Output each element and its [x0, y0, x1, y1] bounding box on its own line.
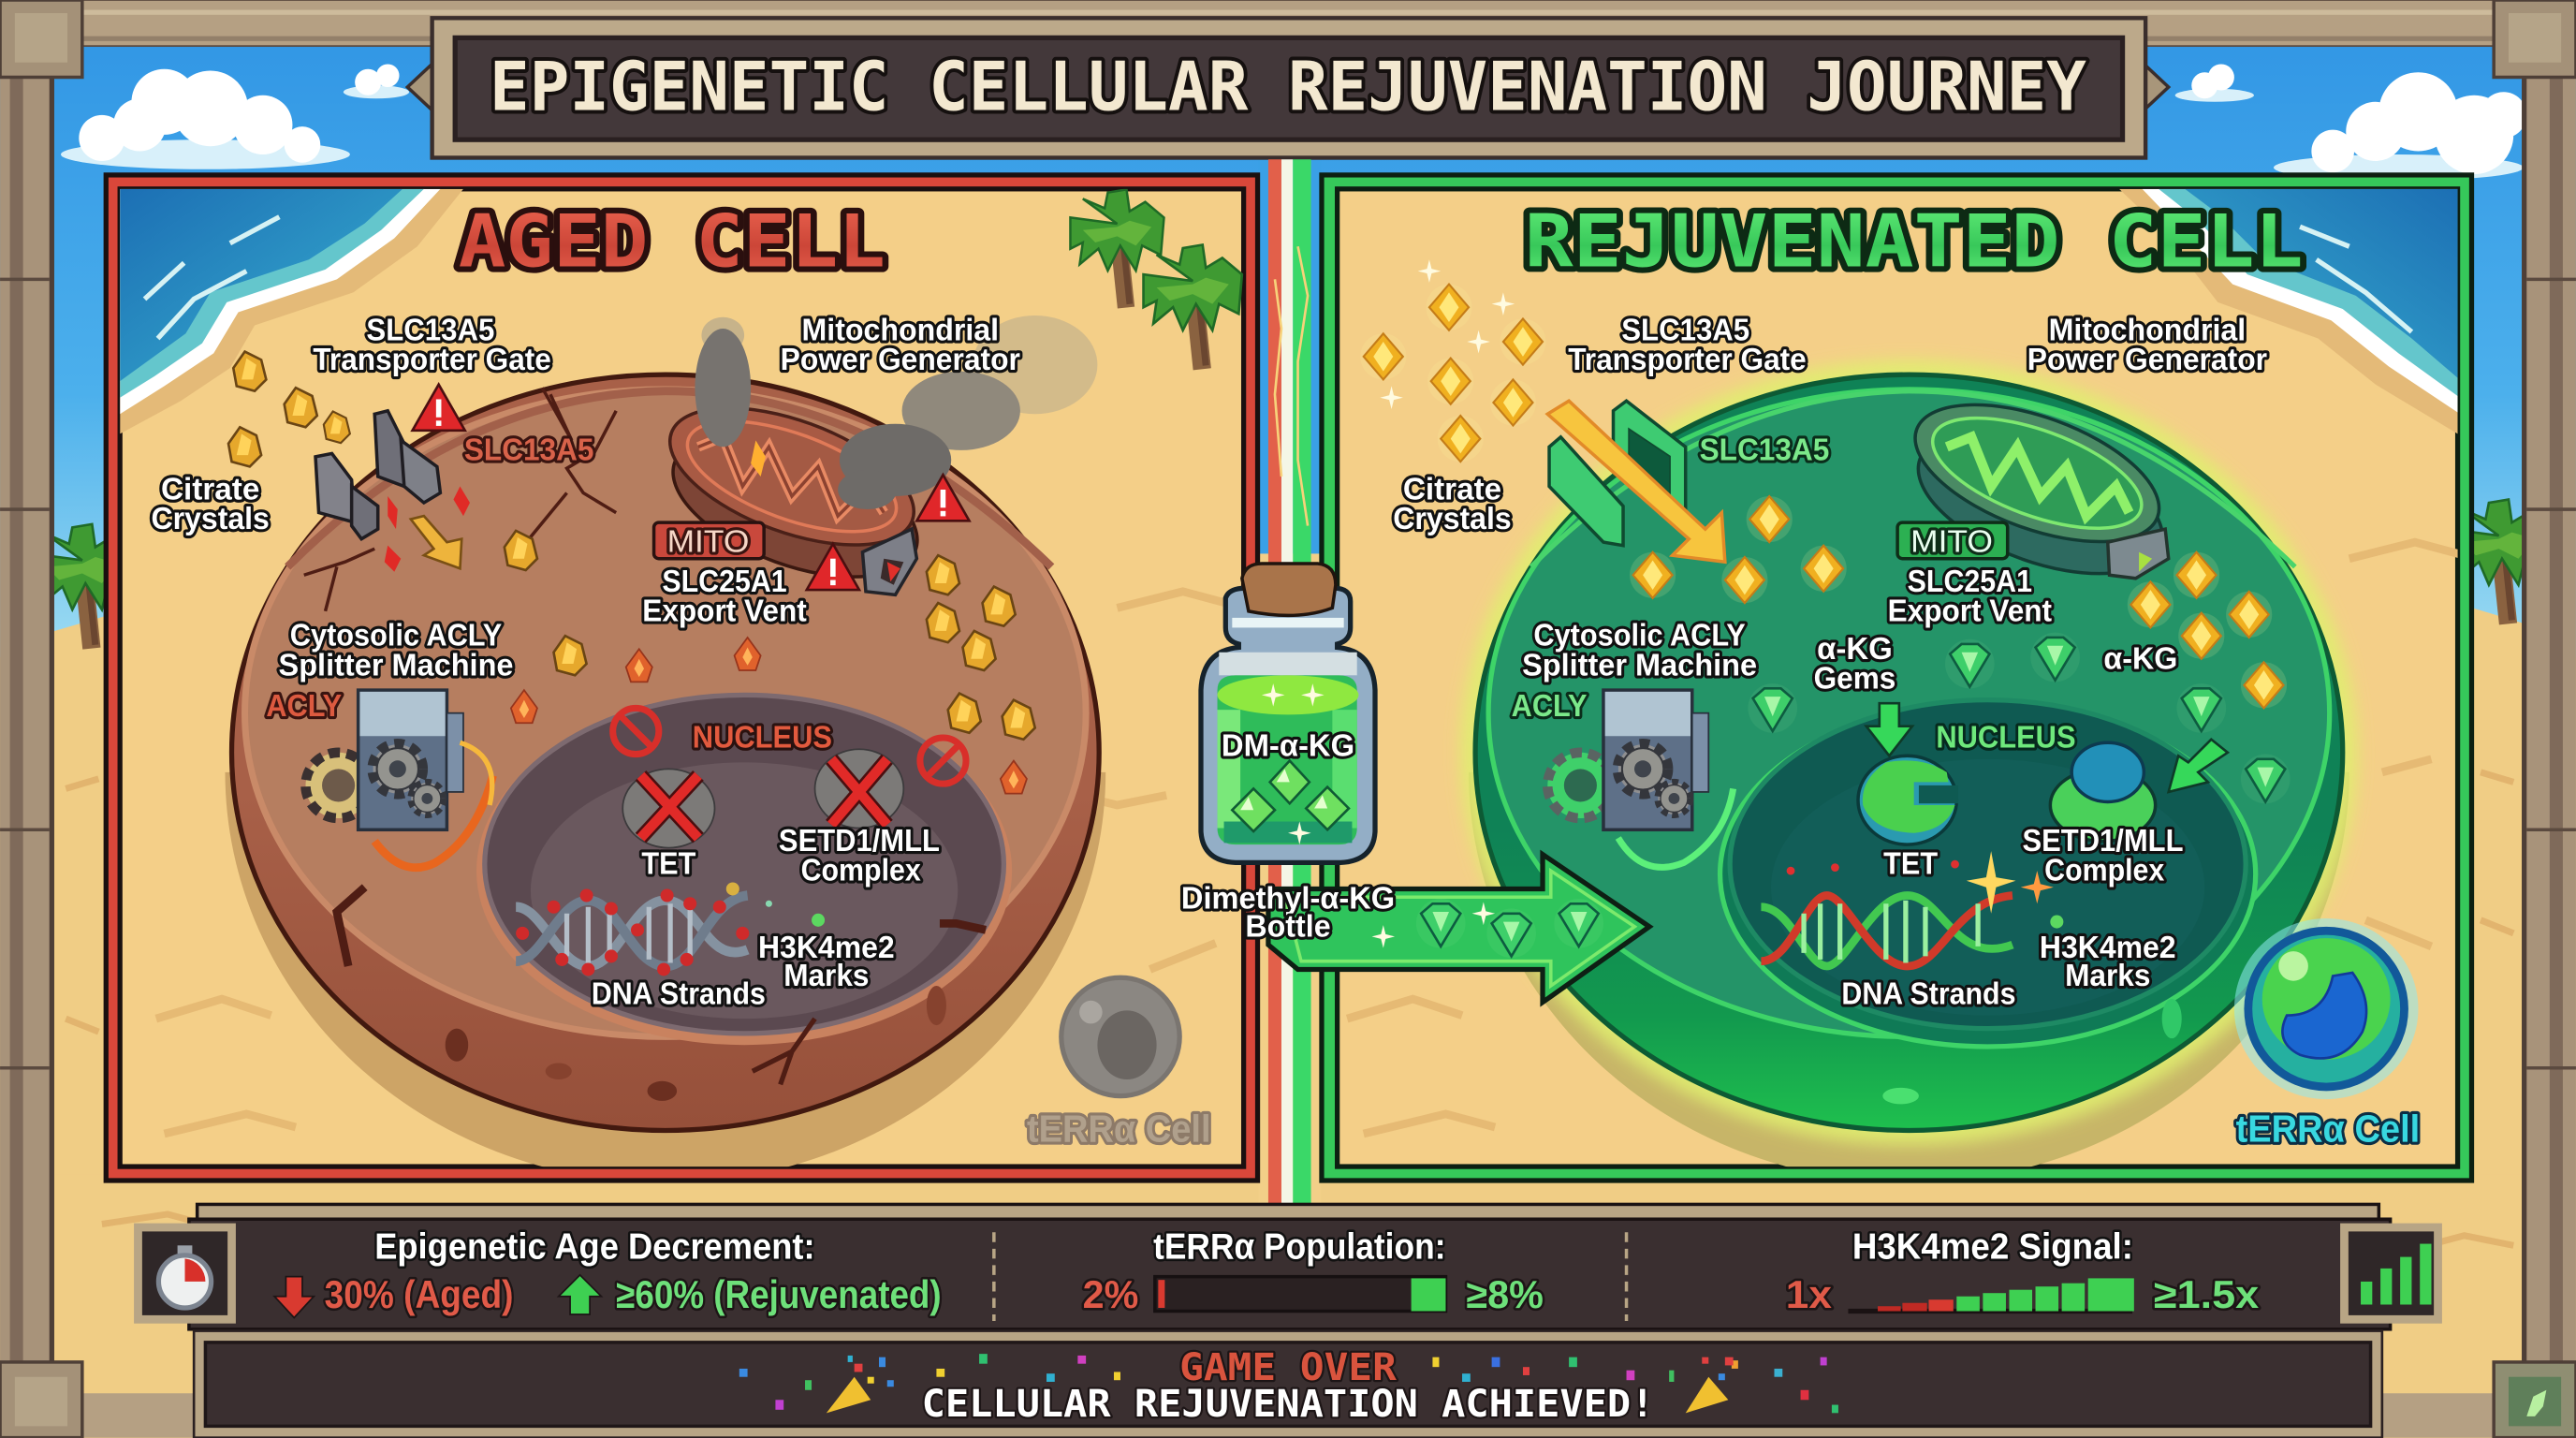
label: SLC25A1 export vent — [1888, 565, 2052, 628]
label: TET: TET — [641, 847, 695, 882]
label: alpha-KG gems: α-KG — [1817, 632, 1893, 667]
rim holes and cracks — [304, 388, 986, 1084]
label: dimethyl-alpha-KG bottle — [1181, 882, 1395, 944]
label: DNA strands: DNA Strands — [592, 976, 766, 1011]
nucleus chamber — [1720, 701, 2256, 1047]
no signs — [613, 708, 966, 784]
label: healthy terra cell: tERRα Cell — [2236, 1108, 2420, 1151]
label: SETD1/MLL complex — [2022, 824, 2183, 888]
dividers — [994, 1232, 1627, 1321]
arrow: treatment into rejuvenated cell — [1268, 855, 1649, 1003]
DNA strands, damaged — [516, 882, 825, 976]
signal icon — [2344, 1227, 2438, 1319]
label: SLC25A1 export vent: SLC25A1 — [1908, 565, 2032, 599]
label: aged terra cell: tERRα Cell — [1027, 1108, 1211, 1151]
mito badge — [1897, 522, 2008, 560]
mito badge: MITO — [1910, 525, 1993, 560]
aged cell body — [232, 374, 1099, 1130]
label: cytosolic ACLY splitter machine: Cytosolic ACLY — [290, 619, 502, 653]
open transporter gate — [1549, 401, 1686, 546]
label: SETD1/MLL complex — [779, 824, 940, 888]
cell glow shadow — [1469, 772, 2349, 1182]
label: SETD1/MLL complex: Complex — [801, 854, 921, 888]
label: SLC13A5 transporter gate: Transporter Gate — [1568, 343, 1807, 377]
sand texture — [156, 542, 1232, 1134]
text: cellular rejuvenation achieved: CELLULAR REJUVENATION ACHIEVED! — [922, 1382, 1654, 1426]
label: nucleus: NUCLEUS — [693, 721, 832, 756]
mito badge: MITO — [667, 525, 749, 560]
label: dimethyl-alpha-KG bottle: Dimethyl-α-KG — [1181, 882, 1395, 917]
label: DNA strands: DNA Strands — [1841, 976, 2015, 1011]
label: SLC25A1 export vent: SLC25A1 — [662, 565, 787, 599]
label: mitochondrial power generator — [781, 313, 1020, 377]
label: SLC25A1 export vent: Export Vent — [642, 594, 807, 628]
healthy mitochondrion — [1897, 377, 2181, 602]
active TET — [1858, 756, 1958, 844]
broken transporter gate — [315, 385, 470, 572]
label: SETD1/MLL complex: SETD1/MLL — [2022, 824, 2183, 858]
arrows into nucleus — [1866, 703, 2228, 792]
label: mitochondrial power generator: Mitochondrial — [2049, 313, 2246, 347]
label: H3K4me2 marks: Marks — [783, 959, 869, 993]
label: H3K4me2 marks: Marks — [2065, 959, 2150, 993]
label: H3K4me2 marks — [2040, 931, 2176, 993]
metric: terra population: tERRα Population: — [1153, 1226, 1445, 1267]
label: mitochondrial power generator: Power Generator — [781, 343, 1020, 377]
damaged mitochondrion — [652, 380, 936, 606]
title text: EPIGENETIC CELLULAR REJUVENATION JOURNEY — [490, 48, 2087, 126]
label: alpha-KG gems: Gems — [1814, 661, 1895, 696]
label: citrate crystals: Crystals — [1393, 502, 1512, 536]
divider: energy stream between panels — [1268, 159, 1311, 1211]
heading: rejuvenated cell: REJUVENATED CELL — [1525, 199, 2304, 284]
confetti right — [1432, 1357, 1838, 1413]
tag: SLC13A5: SLC13A5 — [464, 433, 594, 467]
label: alpha-KG: α-KG — [2103, 641, 2177, 676]
citrate crystals, glowing — [1360, 259, 2287, 708]
label: SETD1/MLL complex: Complex — [2044, 854, 2165, 888]
label: cytosolic ACLY splitter machine: Splitter Machine — [1522, 648, 1757, 682]
label: alpha-KG gems — [1814, 632, 1895, 696]
label: mitochondrial power generator — [2027, 313, 2267, 377]
ACLY machine — [1547, 690, 1734, 867]
label: H3K4me2 marks — [758, 931, 895, 993]
rejuvenated cell body — [1460, 360, 2358, 1145]
metric: H3K4me2 signal: ≥1.5x — [2154, 1272, 2260, 1316]
label: SLC25A1 export vent — [642, 565, 807, 628]
icon: aged terra cell — [1061, 977, 1179, 1096]
label: cytosolic ACLY splitter machine: Cytosolic ACLY — [1533, 619, 1746, 653]
tag: ACLY: ACLY — [1512, 689, 1587, 724]
label: SLC13A5 transporter gate — [313, 313, 551, 377]
label: cytosolic ACLY splitter machine: Splitter Machine — [279, 648, 514, 682]
label: SLC13A5 transporter gate: SLC13A5 — [366, 313, 494, 347]
label: mitochondrial power generator: Power Generator — [2027, 343, 2267, 377]
tag: ACLY: ACLY — [266, 689, 342, 724]
label: DM-alpha-KG: DM-α-KG — [1222, 728, 1354, 763]
mito badge — [654, 522, 764, 560]
metric: H3K4me2 signal — [1786, 1226, 2260, 1316]
glass — [1201, 588, 1375, 862]
metric: epigenetic age decrement: ≥60% (Rejuvenated) — [616, 1272, 942, 1316]
label: H3K4me2 marks: H3K4me2 — [2040, 931, 2176, 965]
metric: terra population: ≥8% — [1466, 1272, 1544, 1316]
metric: H3K4me2 signal: H3K4me2 Signal: — [1852, 1226, 2133, 1267]
DNA strands, restored — [1761, 851, 2063, 966]
label: SLC25A1 export vent: Export Vent — [1888, 594, 2052, 628]
confetti left — [739, 1354, 1120, 1413]
panel: game over banner — [194, 1331, 2382, 1438]
icon: right palm — [2450, 500, 2548, 624]
metric: epigenetic age decrement: Epigenetic Age Decrement: — [374, 1226, 815, 1267]
clouds — [61, 64, 2526, 181]
label: citrate crystals: Citrate — [1403, 473, 1501, 507]
ACLY machine — [305, 690, 493, 868]
panel: rejuvenated cell — [1322, 175, 2471, 1182]
ocean — [120, 189, 463, 433]
label: dimethyl-alpha-KG bottle: Bottle — [1245, 909, 1331, 944]
inactive TET with X — [622, 769, 714, 848]
label: SLC13A5 transporter gate: SLC13A5 — [1621, 313, 1749, 347]
panel: status bar — [138, 1204, 2438, 1329]
citrate crystals — [228, 352, 1035, 794]
text: game over: GAME OVER — [1179, 1345, 1398, 1389]
metric: terra population — [1083, 1226, 1544, 1316]
label: cytosolic ACLY splitter machine — [1522, 619, 1757, 682]
tag: SLC13A5: SLC13A5 — [1700, 433, 1829, 467]
label: SLC13A5 transporter gate — [1568, 313, 1807, 377]
stopwatch icon — [138, 1227, 232, 1319]
metric: terra population: 2% — [1083, 1272, 1138, 1316]
arrow: citrate into cell — [1547, 401, 1725, 562]
label: SLC13A5 transporter gate: Transporter Gate — [313, 343, 551, 377]
label: H3K4me2 marks: H3K4me2 — [758, 931, 895, 965]
label: citrate crystals — [152, 473, 270, 536]
title plaque — [407, 18, 2169, 157]
cell shadow — [225, 772, 1105, 1183]
dimethyl alpha-KG bottle — [1201, 564, 1375, 862]
inactive SETD1/MLL with X — [815, 749, 903, 829]
liquid — [1218, 675, 1357, 844]
sand texture — [1347, 542, 2465, 1134]
icon: healthy terra cell — [2234, 918, 2418, 1099]
label: nucleus: NUCLEUS — [1936, 721, 2076, 756]
cork — [1242, 564, 1336, 615]
nucleus chamber — [476, 697, 1012, 1045]
label: TET: TET — [1883, 847, 1938, 882]
heading: aged cell: AGED CELL — [459, 199, 886, 284]
label: SETD1/MLL complex: SETD1/MLL — [779, 824, 940, 858]
alpha-KG gems — [1748, 633, 2291, 803]
active SETD1/MLL — [2050, 742, 2156, 842]
export vent with warnings — [807, 475, 970, 594]
palm trees — [1070, 189, 1164, 308]
icon: left palm — [33, 524, 131, 650]
smoke plumes — [695, 315, 1097, 509]
panel: aged cell — [106, 175, 1258, 1183]
label: citrate crystals: Crystals — [152, 502, 270, 536]
metric: epigenetic age decrement — [274, 1226, 942, 1318]
metric: H3K4me2 signal: 1x — [1786, 1272, 1833, 1316]
label: citrate crystals: Citrate — [161, 473, 259, 507]
label: citrate crystals — [1393, 473, 1512, 536]
metric: epigenetic age decrement: 30% (Aged) — [325, 1272, 514, 1316]
label: cytosolic ACLY splitter machine — [279, 619, 514, 682]
label: mitochondrial power generator: Mitochondrial — [802, 313, 999, 347]
export vent — [2108, 529, 2169, 579]
ocean — [2119, 189, 2458, 433]
